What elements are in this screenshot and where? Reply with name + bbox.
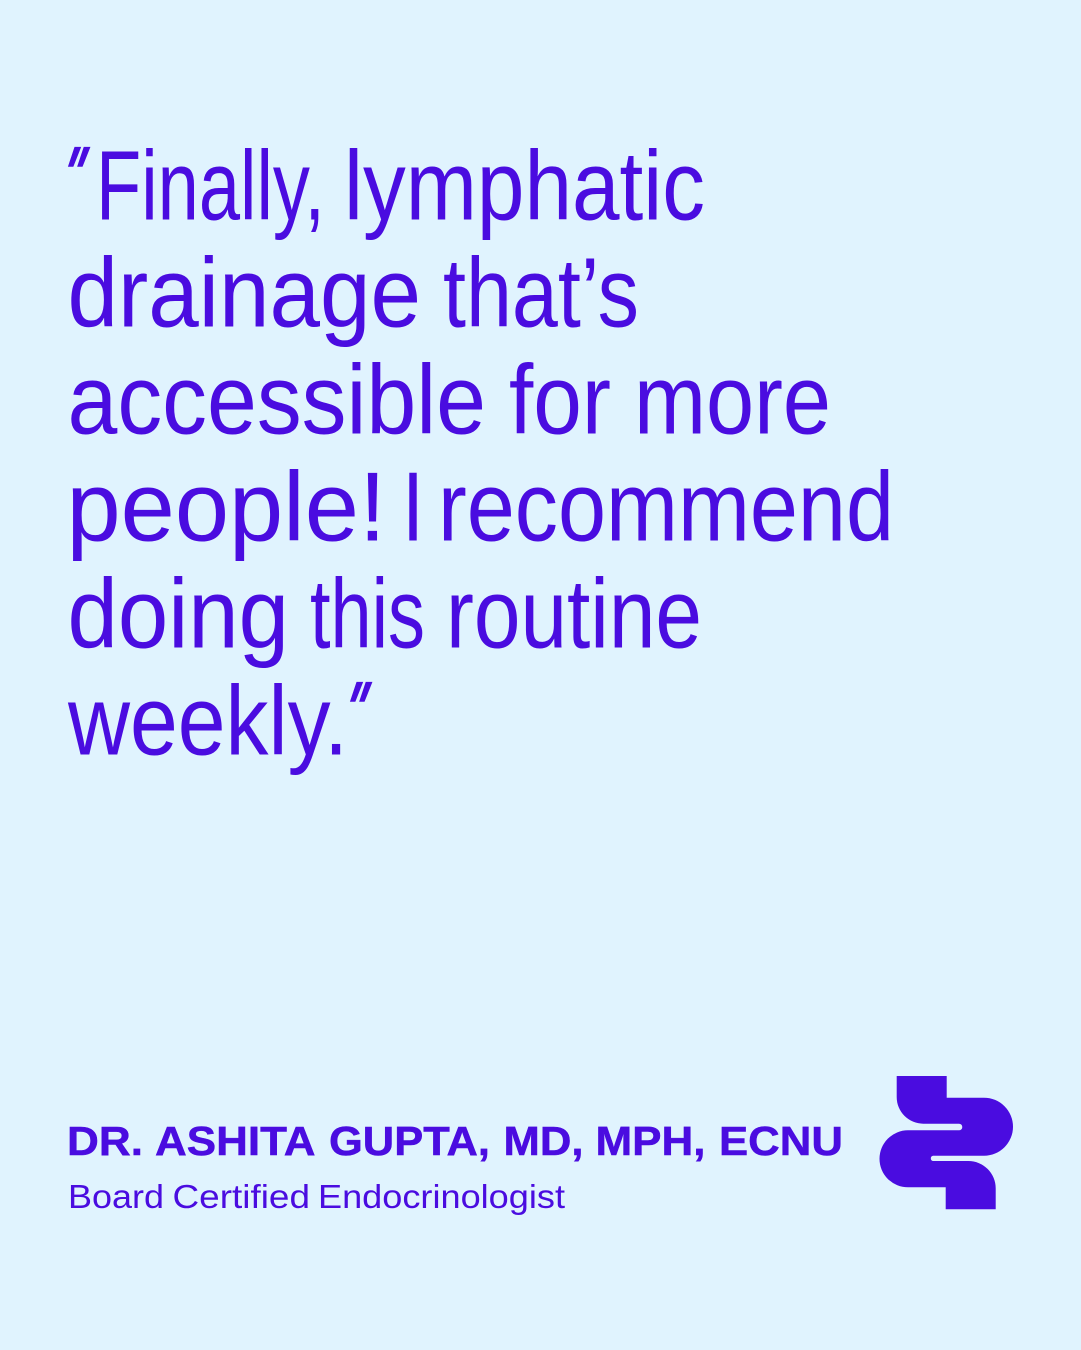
quote text bbox=[47, 131, 894, 776]
quote text: drainage bbox=[68, 238, 421, 348]
quote text: " bbox=[329, 667, 380, 750]
doctor name: DR. bbox=[67, 1118, 143, 1164]
quote text: " bbox=[47, 132, 98, 215]
quote text: weekly. bbox=[67, 666, 348, 776]
attribution bbox=[67, 1118, 843, 1216]
doctor name bbox=[67, 1118, 843, 1164]
quote text: doing bbox=[68, 559, 289, 669]
quote text: recommend bbox=[438, 452, 894, 562]
quote text: accessible bbox=[68, 345, 486, 455]
quote text: this bbox=[310, 559, 425, 669]
quote text: Finally, bbox=[96, 131, 325, 241]
icon: brand logo bbox=[880, 1076, 1013, 1209]
quote text: more bbox=[634, 345, 831, 455]
doctor title: Board bbox=[68, 1179, 164, 1216]
quote text: for bbox=[509, 345, 611, 455]
quote text: that’s bbox=[443, 238, 639, 348]
quote text: lymphatic bbox=[344, 131, 705, 241]
quote text: I bbox=[402, 452, 424, 562]
doctor name: MD, bbox=[504, 1118, 584, 1164]
doctor name: MPH, bbox=[596, 1118, 706, 1164]
doctor title: Endocrinologist bbox=[318, 1179, 566, 1216]
doctor title: Certified bbox=[172, 1179, 310, 1216]
quote text: people! bbox=[66, 452, 386, 562]
quote text: routine bbox=[446, 559, 702, 669]
doctor name: ECNU bbox=[719, 1118, 843, 1164]
doctor title bbox=[68, 1179, 566, 1216]
doctor name: ASHITA bbox=[155, 1118, 316, 1164]
doctor name: GUPTA, bbox=[329, 1118, 490, 1164]
